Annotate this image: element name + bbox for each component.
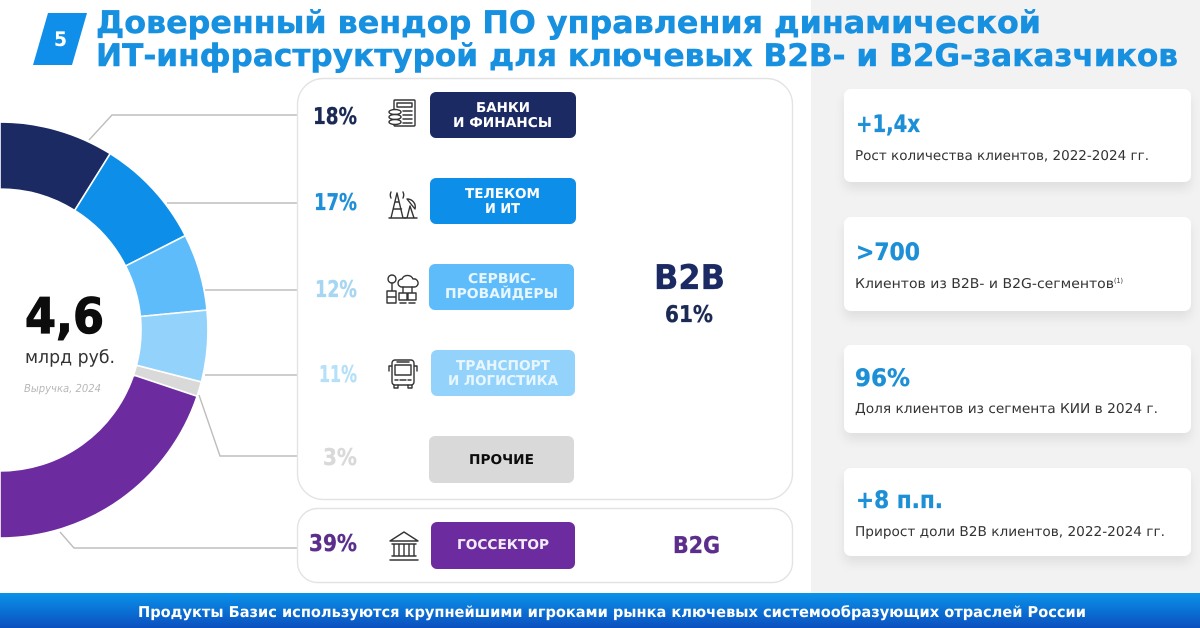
revenue caption: Выручка, 2024 — [24, 382, 101, 395]
card: B2B share growth — [844, 468, 1191, 556]
badge: section number — [33, 13, 87, 65]
button: telecom: ТЕЛЕКОМ — [465, 186, 540, 202]
button: service providers: ПРОВАЙДЕРЫ — [445, 285, 558, 302]
segment: service providers 12% — [126, 236, 207, 316]
icon: government building — [390, 532, 418, 560]
row: other — [323, 436, 574, 483]
segment: government 39% — [0, 375, 197, 538]
right background panel — [811, 0, 1200, 593]
leader lines — [60, 115, 297, 548]
card: client count — [844, 217, 1191, 311]
row: transport — [319, 350, 575, 396]
footer banner — [0, 593, 1200, 628]
button: banks: И ФИНАНСЫ — [453, 115, 552, 131]
icon: antenna tower — [389, 192, 417, 218]
critical infrastructure value: 96% — [855, 364, 910, 392]
critical infrastructure caption: Доля клиентов из сегмента КИИ в 2024 г. — [855, 401, 1158, 417]
B2B share growth value: +8 п.п. — [856, 486, 943, 514]
segment: other 3% — [134, 365, 201, 396]
button: telecom — [430, 178, 576, 224]
row: banks — [313, 92, 576, 138]
card: critical infrastructure share — [844, 345, 1191, 433]
B2G label: B2G — [673, 533, 720, 559]
footer banner: Продукты Базис используются крупнейшими игроками рынка ключевых системообразующих отраслей России — [138, 603, 1086, 621]
button: transport: И ЛОГИСТИКА — [448, 373, 559, 389]
client growth value: +1,4x — [856, 110, 920, 138]
revenue unit: млрд руб. — [25, 347, 115, 368]
title line 2: ИТ-инфраструктурой для ключевых B2B- и B2G-заказчиков — [96, 38, 1178, 74]
client count caption: Клиентов из B2B- и B2G-сегментов — [855, 276, 1114, 292]
B2B label: B2B — [654, 258, 725, 298]
button: transport: ТРАНСПОРТ — [456, 358, 551, 374]
icon: bus — [389, 360, 417, 388]
segment: banks 18% — [0, 122, 110, 210]
panel: B2B segments — [298, 78, 792, 500]
B2B total — [654, 258, 725, 328]
icon: calculator and coins — [389, 100, 415, 126]
button: other: ПРОЧИЕ — [469, 452, 534, 468]
button: service providers: СЕРВИС- — [468, 271, 536, 287]
row: telecom — [314, 178, 576, 224]
title line 1: Доверенный вендор ПО управления динамической — [96, 5, 1041, 41]
button: government — [431, 522, 575, 569]
icon: cloud network — [387, 275, 418, 303]
panel: B2G segment — [298, 508, 792, 582]
button: transport — [431, 350, 575, 396]
transport share: 11% — [319, 362, 357, 388]
B2B share growth caption: Прирост доли B2B клиентов, 2022-2024 гг. — [855, 524, 1165, 540]
card: client growth — [844, 89, 1191, 182]
client growth caption: Рост количества клиентов, 2022-2024 гг. — [855, 148, 1149, 164]
other share: 3% — [323, 445, 357, 471]
banks share: 18% — [313, 104, 357, 130]
badge: section number: 5 — [54, 27, 67, 51]
button: banks — [430, 92, 576, 138]
donut centre value — [24, 288, 115, 395]
donut chart — [0, 122, 208, 538]
button: telecom: И ИТ — [485, 201, 521, 217]
telecom share: 17% — [314, 190, 357, 216]
segment: transport 11% — [136, 310, 208, 382]
row: service providers — [315, 264, 574, 310]
service providers share: 12% — [315, 277, 357, 303]
button: other — [429, 436, 574, 483]
button: government: ГОССЕКТОР — [457, 537, 549, 553]
revenue value: 4,6 — [25, 288, 104, 345]
button: service providers — [429, 264, 574, 310]
client count value: >700 — [856, 238, 920, 266]
button: banks: БАНКИ — [476, 100, 530, 116]
government share: 39% — [309, 531, 357, 557]
title — [33, 5, 1178, 74]
B2B share: 61% — [665, 302, 713, 328]
footnote mark: (1) — [1114, 277, 1123, 285]
segment: telecom 17% — [75, 154, 185, 266]
